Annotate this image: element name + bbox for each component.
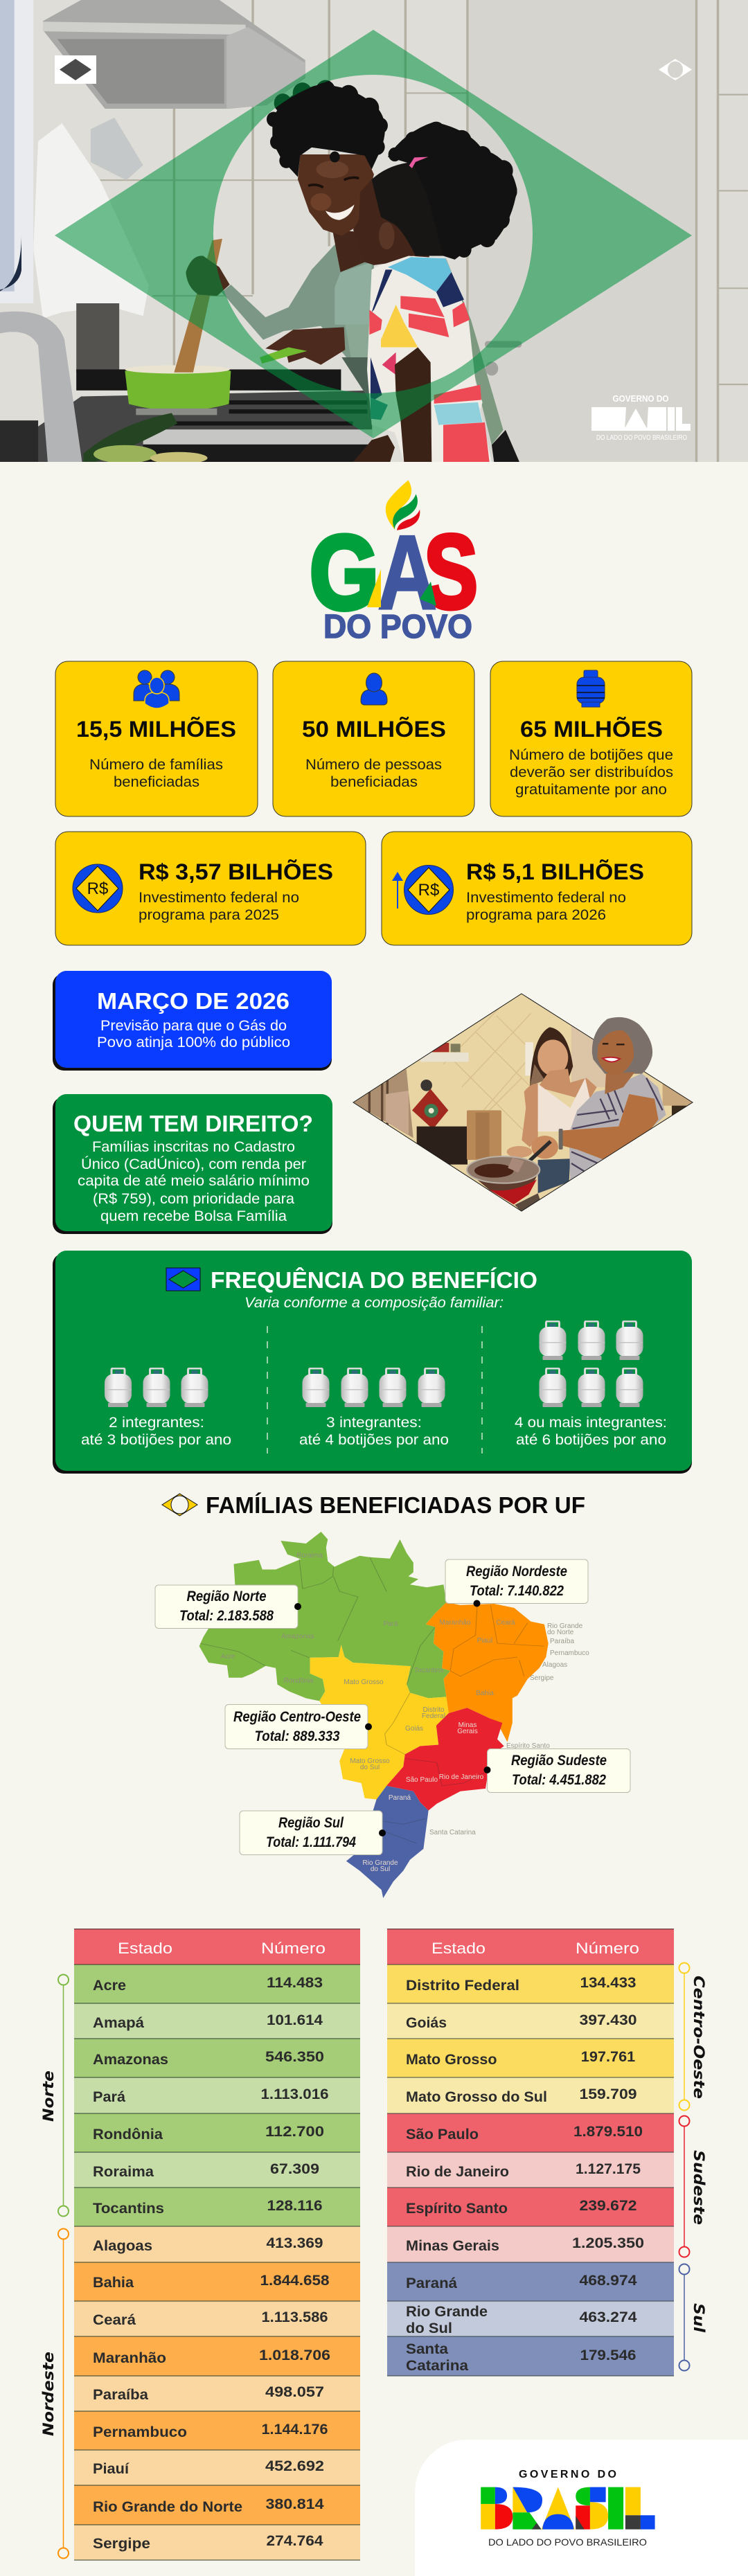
- state labels: Acre: [221, 1653, 235, 1661]
- region marker: Centro-Oeste: Centro-Oeste: [691, 1976, 707, 2099]
- row: Mato Grosso do Sul: [387, 2077, 674, 2113]
- state labels: Mato Grosso: [350, 1757, 390, 1765]
- heading: famílias beneficiadas por UF: FAMÍLIAS BENEFICIADAS POR UF: [206, 1492, 585, 1518]
- footer logo panel: Governo do Brasil: [415, 2440, 748, 2576]
- icon: R$ coin: [73, 864, 123, 913]
- callout: Região Sudeste: Região Sudeste: [511, 1753, 607, 1769]
- hero icon: white diamond with oval: [659, 59, 692, 80]
- table header: Número: [261, 1940, 326, 1957]
- state labels: Rondônia: [284, 1677, 314, 1685]
- card: R$ 3,57 bilhões: programa para 2025: [139, 907, 279, 923]
- card: 15,5 milhões: Número de famílias: [89, 757, 223, 773]
- row: Paraná: [387, 2262, 674, 2301]
- row: Acre: [74, 1965, 360, 2003]
- row: Distrito Federal: Distrito Federal: [406, 1978, 519, 1994]
- state labels: Rio Grande: [362, 1859, 398, 1867]
- state labels: Alagoas: [542, 1661, 567, 1669]
- group: 4 ou mais integrantes: 4 ou mais integrantes:: [515, 1415, 667, 1431]
- card: 65 milhões: deverão ser distribuídos: [510, 764, 673, 780]
- logo: Gás do Povo: DO POVO: [323, 609, 472, 645]
- callout: Região Sudeste: Total: 4.451.882: [512, 1772, 606, 1788]
- logo: Gás do Povo: S: [424, 513, 478, 631]
- hero icon: white square with diamond: [55, 55, 96, 84]
- row: Pernambuco: Pernambuco: [93, 2424, 187, 2440]
- row: Mato Grosso: 197.761: [581, 2049, 636, 2065]
- row: Rio Grande do Norte: 380.814: [266, 2496, 324, 2512]
- row: São Paulo: 1.879.510: [573, 2124, 643, 2140]
- row: Paraíba: [74, 2376, 360, 2411]
- icon: gas cylinder: [577, 670, 605, 707]
- row: São Paulo: São Paulo: [406, 2127, 479, 2143]
- row: Sergipe: Sergipe: [93, 2536, 150, 2552]
- card: 50 milhões: 50 MILHÕES: [302, 717, 446, 742]
- group: 2 integrantes: até 3 botijões por ano: [81, 1432, 231, 1448]
- state labels: Federal: [422, 1712, 445, 1720]
- panel: frequência do benefício: FREQUÊNCIA DO BENEFÍCIO: [211, 1267, 537, 1293]
- card: 65 milhões: 65 MILHÕES: [520, 717, 663, 742]
- callout: Região Sul: Total: 1.111.794: [266, 1834, 356, 1850]
- row: Rio Grande do Norte: Rio Grande do Norte: [93, 2499, 242, 2515]
- icon: R$ coin with up arrow: R$: [418, 881, 439, 900]
- state labels: Espírito Santo: [506, 1742, 550, 1750]
- card: R$ 5,1 bilhões: [382, 832, 692, 945]
- region marker: Nordeste: [40, 2228, 69, 2558]
- row: Piauí: 452.692: [265, 2458, 324, 2474]
- panel: quem tem direito: capita de até meio salário mínimo: [78, 1173, 310, 1189]
- group: 2 integrantes: [81, 1368, 231, 1448]
- row: Tocantins: [74, 2188, 360, 2226]
- callout: Região Norte: [155, 1585, 301, 1629]
- region marker: Sudeste: [679, 2116, 707, 2257]
- row: Alagoas: [74, 2226, 360, 2262]
- row: Amapá: 101.614: [267, 2012, 323, 2028]
- card: 15,5 milhões: 15,5 MILHÕES: [76, 717, 236, 742]
- row: Rio de Janeiro: 1.127.175: [576, 2161, 641, 2177]
- region marker: Sul: Sul: [691, 2303, 707, 2333]
- state labels: do Sul: [371, 1866, 390, 1873]
- state labels: Sergipe: [530, 1674, 554, 1682]
- row: Bahia: Bahia: [93, 2275, 134, 2291]
- row: Santa Catarina: Santa: [406, 2341, 448, 2357]
- panel: março de 2026: MARÇO DE 2026: [97, 988, 290, 1014]
- callout: Região Centro-Oeste: Região Centro-Oeste: [233, 1709, 361, 1725]
- row: Espírito Santo: Espírito Santo: [406, 2201, 508, 2217]
- hero logo: Governo do Brasil white: DO LADO DO POVO BRASILEIRO: [596, 434, 687, 442]
- icon: R$ coin with up arrow: [392, 866, 453, 914]
- row: Roraima: Roraima: [93, 2164, 154, 2180]
- panel: março de 2026: Previsão para que o Gás do: [100, 1018, 287, 1034]
- group: 4 ou mais integrantes: até 6 botijões por ano: [516, 1432, 666, 1448]
- row: Acre: Acre: [93, 1978, 126, 1994]
- row: Goiás: 397.430: [579, 2012, 637, 2028]
- region marker: Norte: [40, 1975, 69, 2216]
- row: Paraná: Paraná: [406, 2275, 457, 2291]
- row: Alagoas: Alagoas: [93, 2238, 152, 2254]
- row: Acre: 114.483: [267, 1975, 323, 1991]
- table: Centro-Oeste, Sudeste and Sul: [387, 1929, 674, 2376]
- table: Norte and Nordeste: [74, 1929, 360, 2560]
- row: Rio Grande do Norte: [74, 2485, 360, 2525]
- row: Goiás: Goiás: [406, 2015, 447, 2031]
- footer logo panel: Governo do Brasil: GOVERNO DO: [519, 2469, 616, 2480]
- state labels: do Sul: [360, 1764, 380, 1771]
- row: Minas Gerais: [387, 2226, 674, 2262]
- row: Mato Grosso do Sul: Mato Grosso do Sul: [406, 2089, 547, 2105]
- state labels: Bahia: [476, 1690, 494, 1697]
- row: São Paulo: [387, 2113, 674, 2152]
- state labels: Roraima: [296, 1552, 323, 1559]
- callout: Região Sul: [240, 1811, 386, 1854]
- panel: quem tem direito: [53, 1094, 332, 1234]
- row: Pernambuco: [74, 2411, 360, 2450]
- hero logo: Governo do Brasil white: GOVERNO DO: [612, 393, 669, 404]
- child: [353, 177, 429, 265]
- row: Rondônia: Rondônia: [93, 2127, 163, 2143]
- callout: Região Sul: Região Sul: [278, 1815, 344, 1831]
- row: Santa Catarina: [387, 2336, 674, 2376]
- hero overlay: green diamond with circle cut-out: [55, 30, 692, 438]
- state labels: [221, 1552, 589, 1873]
- row: Amazonas: 546.350: [265, 2049, 324, 2065]
- group: 3 integrantes: até 4 botijões por ano: [299, 1432, 449, 1448]
- woman: [222, 244, 374, 400]
- row: Bahia: 1.844.658: [260, 2273, 330, 2289]
- row: Amapá: [74, 2003, 360, 2039]
- region marker: Norte: Norte: [40, 2070, 57, 2122]
- hero logo: Governo do Brasil white: [591, 393, 691, 442]
- callout: Região Nordeste: [445, 1559, 588, 1607]
- state labels: Tocantins: [414, 1667, 443, 1674]
- row: Minas Gerais: Minas Gerais: [406, 2238, 499, 2254]
- row: Rio Grande do Sul: [387, 2301, 674, 2336]
- row: Ceará: Ceará: [93, 2312, 136, 2328]
- row: Santa Catarina: 179.546: [580, 2347, 636, 2363]
- region: Norte: [199, 1532, 450, 1701]
- row: Tocantins: Tocantins: [93, 2201, 164, 2217]
- row: Piauí: Piauí: [93, 2461, 130, 2477]
- hero photo: mother and daughter cooking: [0, 0, 748, 464]
- icon: flame: [386, 480, 420, 530]
- panel: quem tem direito: quem recebe Bolsa Família: [100, 1208, 287, 1224]
- card: R$ 3,57 bilhões: [55, 832, 366, 945]
- icon: person: [361, 673, 387, 705]
- card: 65 milhões: gratuitamente por ano: [515, 782, 667, 798]
- state labels: Amazonas: [281, 1633, 314, 1640]
- state labels: Ceará: [496, 1619, 515, 1627]
- row: Roraima: [74, 2152, 360, 2188]
- older woman's head above diamond edge: [592, 1017, 652, 1094]
- row: Piauí: [74, 2450, 360, 2485]
- row: Santa Catarina: Catarina: [406, 2358, 468, 2374]
- row: Pará: Pará: [93, 2089, 125, 2105]
- callout: Região Sudeste: [483, 1749, 630, 1792]
- row: Maranhão: Maranhão: [93, 2350, 166, 2366]
- row: Rio Grande do Sul: Rio Grande: [406, 2304, 488, 2320]
- table header: [387, 1929, 674, 1965]
- region: Nordeste: [426, 1602, 549, 1742]
- state labels: São Paulo: [406, 1776, 438, 1784]
- row: Pará: 1.113.016: [260, 2086, 328, 2102]
- row: Tocantins: 128.116: [267, 2198, 323, 2214]
- card: 15,5 milhões: [55, 661, 258, 816]
- panel: quem tem direito: Famílias inscritas no Cadastro: [92, 1139, 295, 1155]
- callout: Região Nordeste: Total: 7.140.822: [470, 1583, 564, 1599]
- row: Alagoas: 413.369: [266, 2235, 323, 2251]
- diamond photo: two women cooking: [346, 990, 700, 1219]
- row: Paraíba: 498.057: [265, 2384, 324, 2400]
- row: Pará: [74, 2077, 360, 2113]
- logo: Gás do Povo: G: [310, 514, 379, 632]
- row: Paraíba: Paraíba: [93, 2387, 148, 2403]
- callout: Região Nordeste: Região Nordeste: [466, 1564, 567, 1580]
- callout: Região Centro-Oeste: [225, 1705, 372, 1749]
- card: 50 milhões: Número de pessoas: [305, 757, 442, 773]
- row: Paraná: 468.974: [579, 2273, 637, 2289]
- callout: Região Norte: Região Norte: [187, 1589, 267, 1604]
- row: Roraima: 67.309: [270, 2161, 319, 2177]
- card: R$ 5,1 bilhões: R$ 5,1 BILHÕES: [466, 859, 644, 884]
- row: Espírito Santo: 239.672: [579, 2198, 637, 2214]
- card: R$ 3,57 bilhões: R$ 3,57 BILHÕES: [139, 859, 333, 884]
- panel: março de 2026: [53, 971, 332, 1071]
- state labels: do Norte: [547, 1629, 574, 1636]
- row: Maranhão: [74, 2336, 360, 2376]
- row: Pernambuco: 1.144.176: [262, 2422, 328, 2438]
- row: Sergipe: [74, 2525, 360, 2560]
- panel: frequência do benefício: [53, 1251, 692, 1474]
- region marker: Nordeste: Nordeste: [40, 2352, 57, 2436]
- card: 65 milhões: Número de botijões que: [509, 747, 673, 763]
- card: 65 milhões: [490, 661, 692, 816]
- state labels: Pará: [383, 1620, 398, 1628]
- icon: R$ coin: R$: [87, 879, 108, 898]
- card: 50 milhões: [273, 661, 474, 816]
- region marker: Sudeste: Sudeste: [691, 2150, 707, 2225]
- region: Sul: [346, 1786, 429, 1898]
- row: Amazonas: Amazonas: [93, 2052, 168, 2068]
- group: 2 integrantes: 2 integrantes:: [109, 1415, 204, 1431]
- row: Sergipe: 274.764: [266, 2533, 323, 2549]
- region marker: Centro-Oeste: [679, 1962, 707, 2111]
- row: Amapá: Amapá: [93, 2015, 144, 2031]
- logo: Gás do Povo: [310, 480, 478, 645]
- map: Brazil by region: [155, 1532, 630, 1898]
- row: Rio Grande do Sul: 463.274: [579, 2309, 637, 2325]
- card: R$ 5,1 bilhões: Investimento federal no: [466, 890, 626, 906]
- row: Rio de Janeiro: Rio de Janeiro: [406, 2164, 509, 2180]
- logo: Gás do Povo: A: [377, 514, 437, 632]
- row: Mato Grosso: Mato Grosso: [406, 2052, 497, 2068]
- icon: yellow diamond: [162, 1494, 197, 1516]
- state labels: Minas: [458, 1721, 477, 1729]
- group: 4 ou mais integrantes: [515, 1321, 667, 1448]
- logo mark: BRASIL: [481, 2487, 655, 2530]
- row: Rondônia: 112.700: [265, 2124, 324, 2140]
- state labels: Pernambuco: [550, 1649, 589, 1657]
- row: Ceará: 1.113.586: [262, 2309, 328, 2325]
- footer logo panel: Governo do Brasil: DO LADO DO POVO BRASILEIRO: [488, 2537, 647, 2548]
- panel: março de 2026: Povo atinja 100% do público: [97, 1035, 290, 1050]
- icon: flag square: [166, 1268, 200, 1291]
- row: Bahia: [74, 2262, 360, 2301]
- panel: quem tem direito: (R$ 759), com prioridade para: [93, 1191, 294, 1207]
- table header: Número: [576, 1940, 639, 1957]
- state labels: Santa Catarina: [429, 1829, 476, 1836]
- row: Goiás: [387, 2003, 674, 2039]
- state labels: Distrito: [422, 1706, 445, 1714]
- region marker: Sul: [679, 2264, 707, 2371]
- table header: [74, 1929, 360, 1965]
- row: Amazonas: [74, 2039, 360, 2077]
- row: Ceará: [74, 2301, 360, 2336]
- group: 3 integrantes: [299, 1368, 449, 1448]
- panel: frequência do benefício: Varia conforme a composição familiar:: [244, 1295, 504, 1311]
- group: 3 integrantes: 3 integrantes:: [326, 1415, 422, 1431]
- panel: quem tem direito: Único (CadÚnico), com renda per: [81, 1156, 306, 1172]
- row: Mato Grosso do Sul: 159.709: [579, 2086, 637, 2102]
- state labels: Rio de Janeiro: [439, 1773, 484, 1781]
- state labels: Paraná: [389, 1794, 411, 1802]
- row: Espírito Santo: [387, 2188, 674, 2226]
- callout: Região Norte: Total: 2.183.588: [179, 1608, 274, 1624]
- state labels: Goiás: [405, 1725, 423, 1733]
- callout: Região Centro-Oeste: Total: 889.333: [255, 1728, 340, 1744]
- row: Minas Gerais: 1.205.350: [572, 2235, 644, 2251]
- region: Sudeste: [386, 1708, 504, 1810]
- state labels: Rio Grande: [547, 1622, 583, 1630]
- row: Mato Grosso: [387, 2039, 674, 2077]
- row: Rondônia: [74, 2113, 360, 2152]
- card: 15,5 milhões: beneficiadas: [114, 774, 199, 790]
- card: R$ 3,57 bilhões: Investimento federal no: [139, 890, 299, 906]
- state labels: Piauí: [477, 1637, 493, 1645]
- state labels: Gerais: [457, 1728, 478, 1735]
- row: Distrito Federal: 134.433: [580, 1975, 636, 1991]
- table header: Estado: [118, 1940, 172, 1957]
- table header: Estado: [431, 1940, 486, 1957]
- panel: quem tem direito: QUEM TEM DIREITO?: [73, 1111, 313, 1136]
- row: Maranhão: 1.018.706: [259, 2347, 330, 2363]
- region: Centro-Oeste: [310, 1645, 449, 1800]
- state labels: Maranhão: [439, 1619, 471, 1627]
- icon: family: [134, 670, 179, 708]
- row: Rio Grande do Sul: do Sul: [406, 2320, 452, 2336]
- state labels: Mato Grosso: [344, 1679, 384, 1686]
- card: 50 milhões: beneficiadas: [330, 774, 418, 790]
- state labels: Paraíba: [550, 1638, 574, 1645]
- card: R$ 5,1 bilhões: programa para 2026: [466, 907, 606, 923]
- row: Rio de Janeiro: [387, 2152, 674, 2188]
- row: Distrito Federal: [387, 1965, 674, 2003]
